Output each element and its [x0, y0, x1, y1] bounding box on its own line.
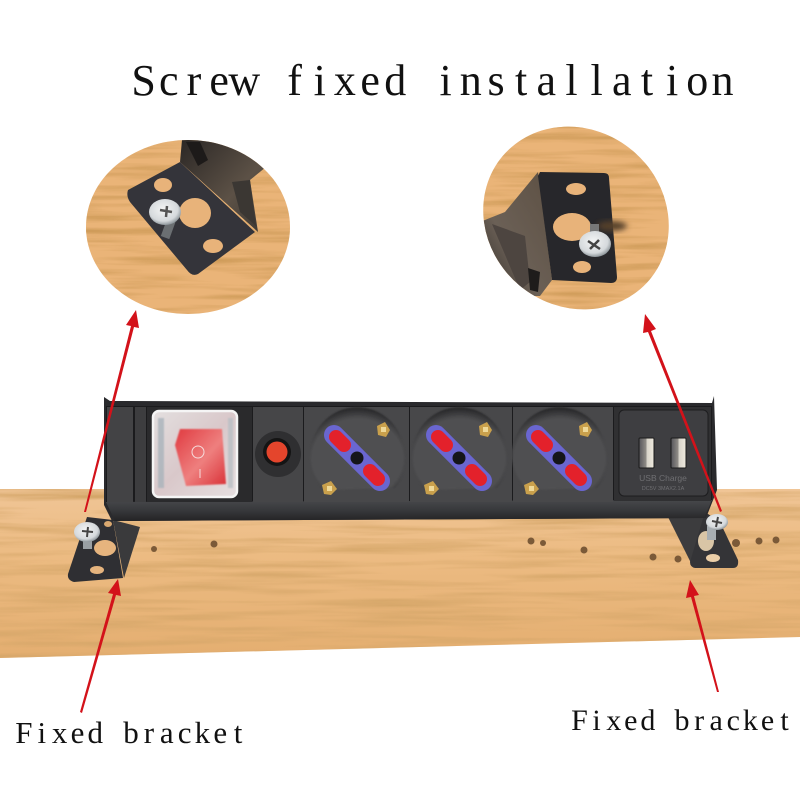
- right fixed bracket on board: [668, 512, 738, 568]
- right detail: bracket side: [480, 172, 552, 296]
- USB charge module: [614, 407, 711, 501]
- blank modules: [107, 407, 146, 502]
- switch module: [147, 407, 252, 502]
- label: left fixed bracket: Fixed bracket: [15, 715, 243, 750]
- socket 1: [304, 407, 409, 502]
- USB label: USB Charge: [639, 473, 687, 483]
- right bracket screw: [706, 514, 728, 540]
- strip body: [104, 396, 717, 521]
- red rocker switch: [175, 429, 226, 486]
- title: Screw fixed installation: [131, 56, 734, 105]
- panel: left zoomed detail circle: [86, 140, 290, 314]
- panel: right zoomed detail circle: [483, 126, 669, 310]
- arrow: to left bracket: [80, 579, 121, 713]
- left bracket screw: [74, 522, 100, 549]
- USB label: [639, 473, 687, 492]
- left detail: screw: [149, 199, 181, 239]
- right detail: bracket plate: [538, 172, 617, 283]
- USB label: DC5V 3MAX2.1A: [642, 486, 685, 492]
- fuse module: [253, 407, 303, 502]
- strip bottom band: [106, 500, 712, 521]
- right detail: screw: [579, 221, 627, 257]
- power strip: [104, 396, 717, 521]
- arrow: to right circle: [643, 314, 722, 512]
- left fixed bracket on board: [68, 517, 140, 582]
- left detail: bracket plate: [127, 162, 255, 275]
- strip face: [106, 406, 712, 502]
- socket 3: [512, 407, 613, 502]
- USB ports: [639, 438, 686, 468]
- mounting holes in board: [151, 536, 780, 562]
- socket 2: [410, 407, 512, 502]
- label: right fixed bracket: Fixed bracket: [571, 704, 789, 737]
- wooden board: [0, 489, 800, 659]
- arrow: to left circle: [84, 310, 139, 512]
- arrow: to right bracket: [686, 580, 719, 692]
- left detail: bracket upright: [180, 140, 266, 232]
